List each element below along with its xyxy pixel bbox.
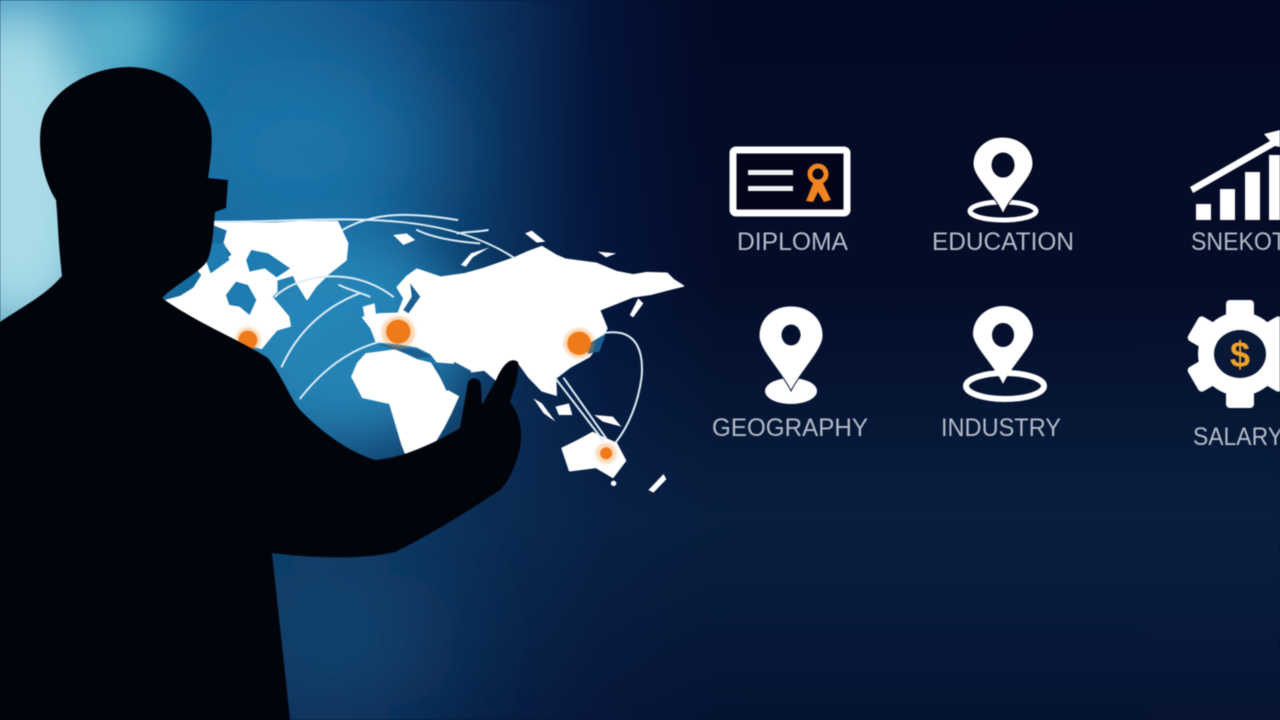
Africa	[352, 350, 458, 461]
label: geography: GEOGRAPHY	[712, 414, 868, 442]
hub: Europe	[381, 316, 415, 349]
Eurasia	[363, 247, 683, 395]
icon: education pin	[970, 137, 1036, 220]
icon: salary gear: $	[1230, 334, 1250, 375]
label: diploma: DIPLOMA	[737, 228, 848, 256]
icon: growth chart	[1190, 130, 1280, 220]
person silhouette	[0, 67, 521, 720]
label: education: EDUCATION	[932, 228, 1074, 256]
islands	[363, 231, 666, 493]
hub: East Asia	[564, 328, 595, 359]
Australia	[562, 433, 625, 477]
icon: geography pin	[759, 306, 823, 404]
icon: industry pin	[966, 306, 1044, 399]
North America and Greenland	[162, 222, 348, 348]
label: industry: INDUSTRY	[941, 414, 1061, 442]
hub: Americas	[235, 327, 261, 353]
flight routes	[214, 215, 642, 442]
icon: diploma	[733, 150, 847, 213]
hub: Australia	[595, 443, 617, 464]
world map	[162, 215, 683, 493]
inland seas	[376, 283, 606, 358]
icon: salary gear	[1186, 300, 1280, 408]
